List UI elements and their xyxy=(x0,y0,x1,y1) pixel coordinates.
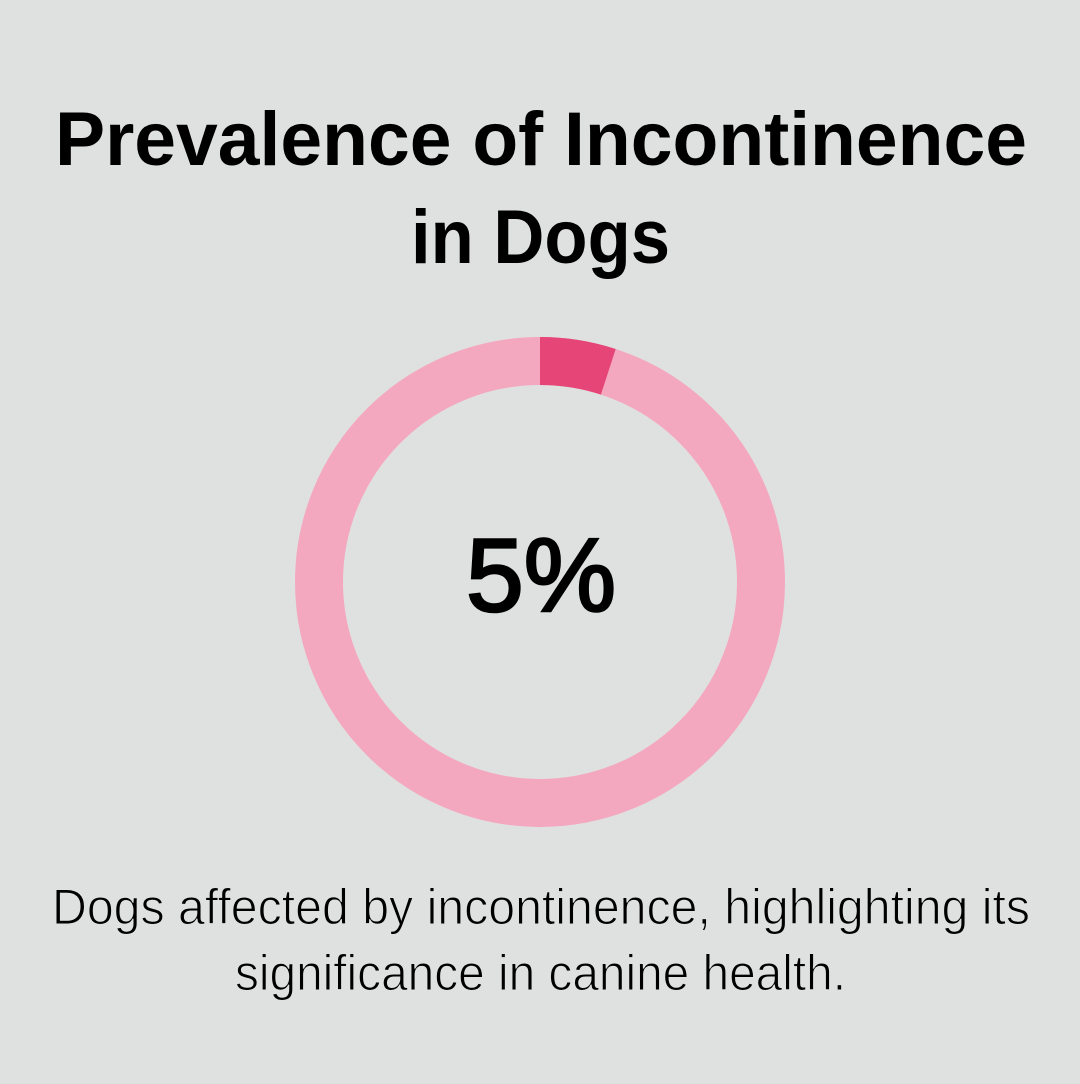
description text: significance in canine health. xyxy=(235,945,846,1001)
description text xyxy=(52,879,1030,1001)
title: in Dogs xyxy=(411,195,670,280)
highlighted segment xyxy=(540,361,608,372)
description text: Dogs affected by incontinence, highlighting its xyxy=(52,879,1030,935)
title: Prevalence of Incontinence xyxy=(55,97,1027,182)
center value: 5% xyxy=(466,518,616,634)
remaining ring xyxy=(319,361,761,803)
title xyxy=(55,97,1027,280)
donut chart: 5 percent xyxy=(319,361,761,803)
